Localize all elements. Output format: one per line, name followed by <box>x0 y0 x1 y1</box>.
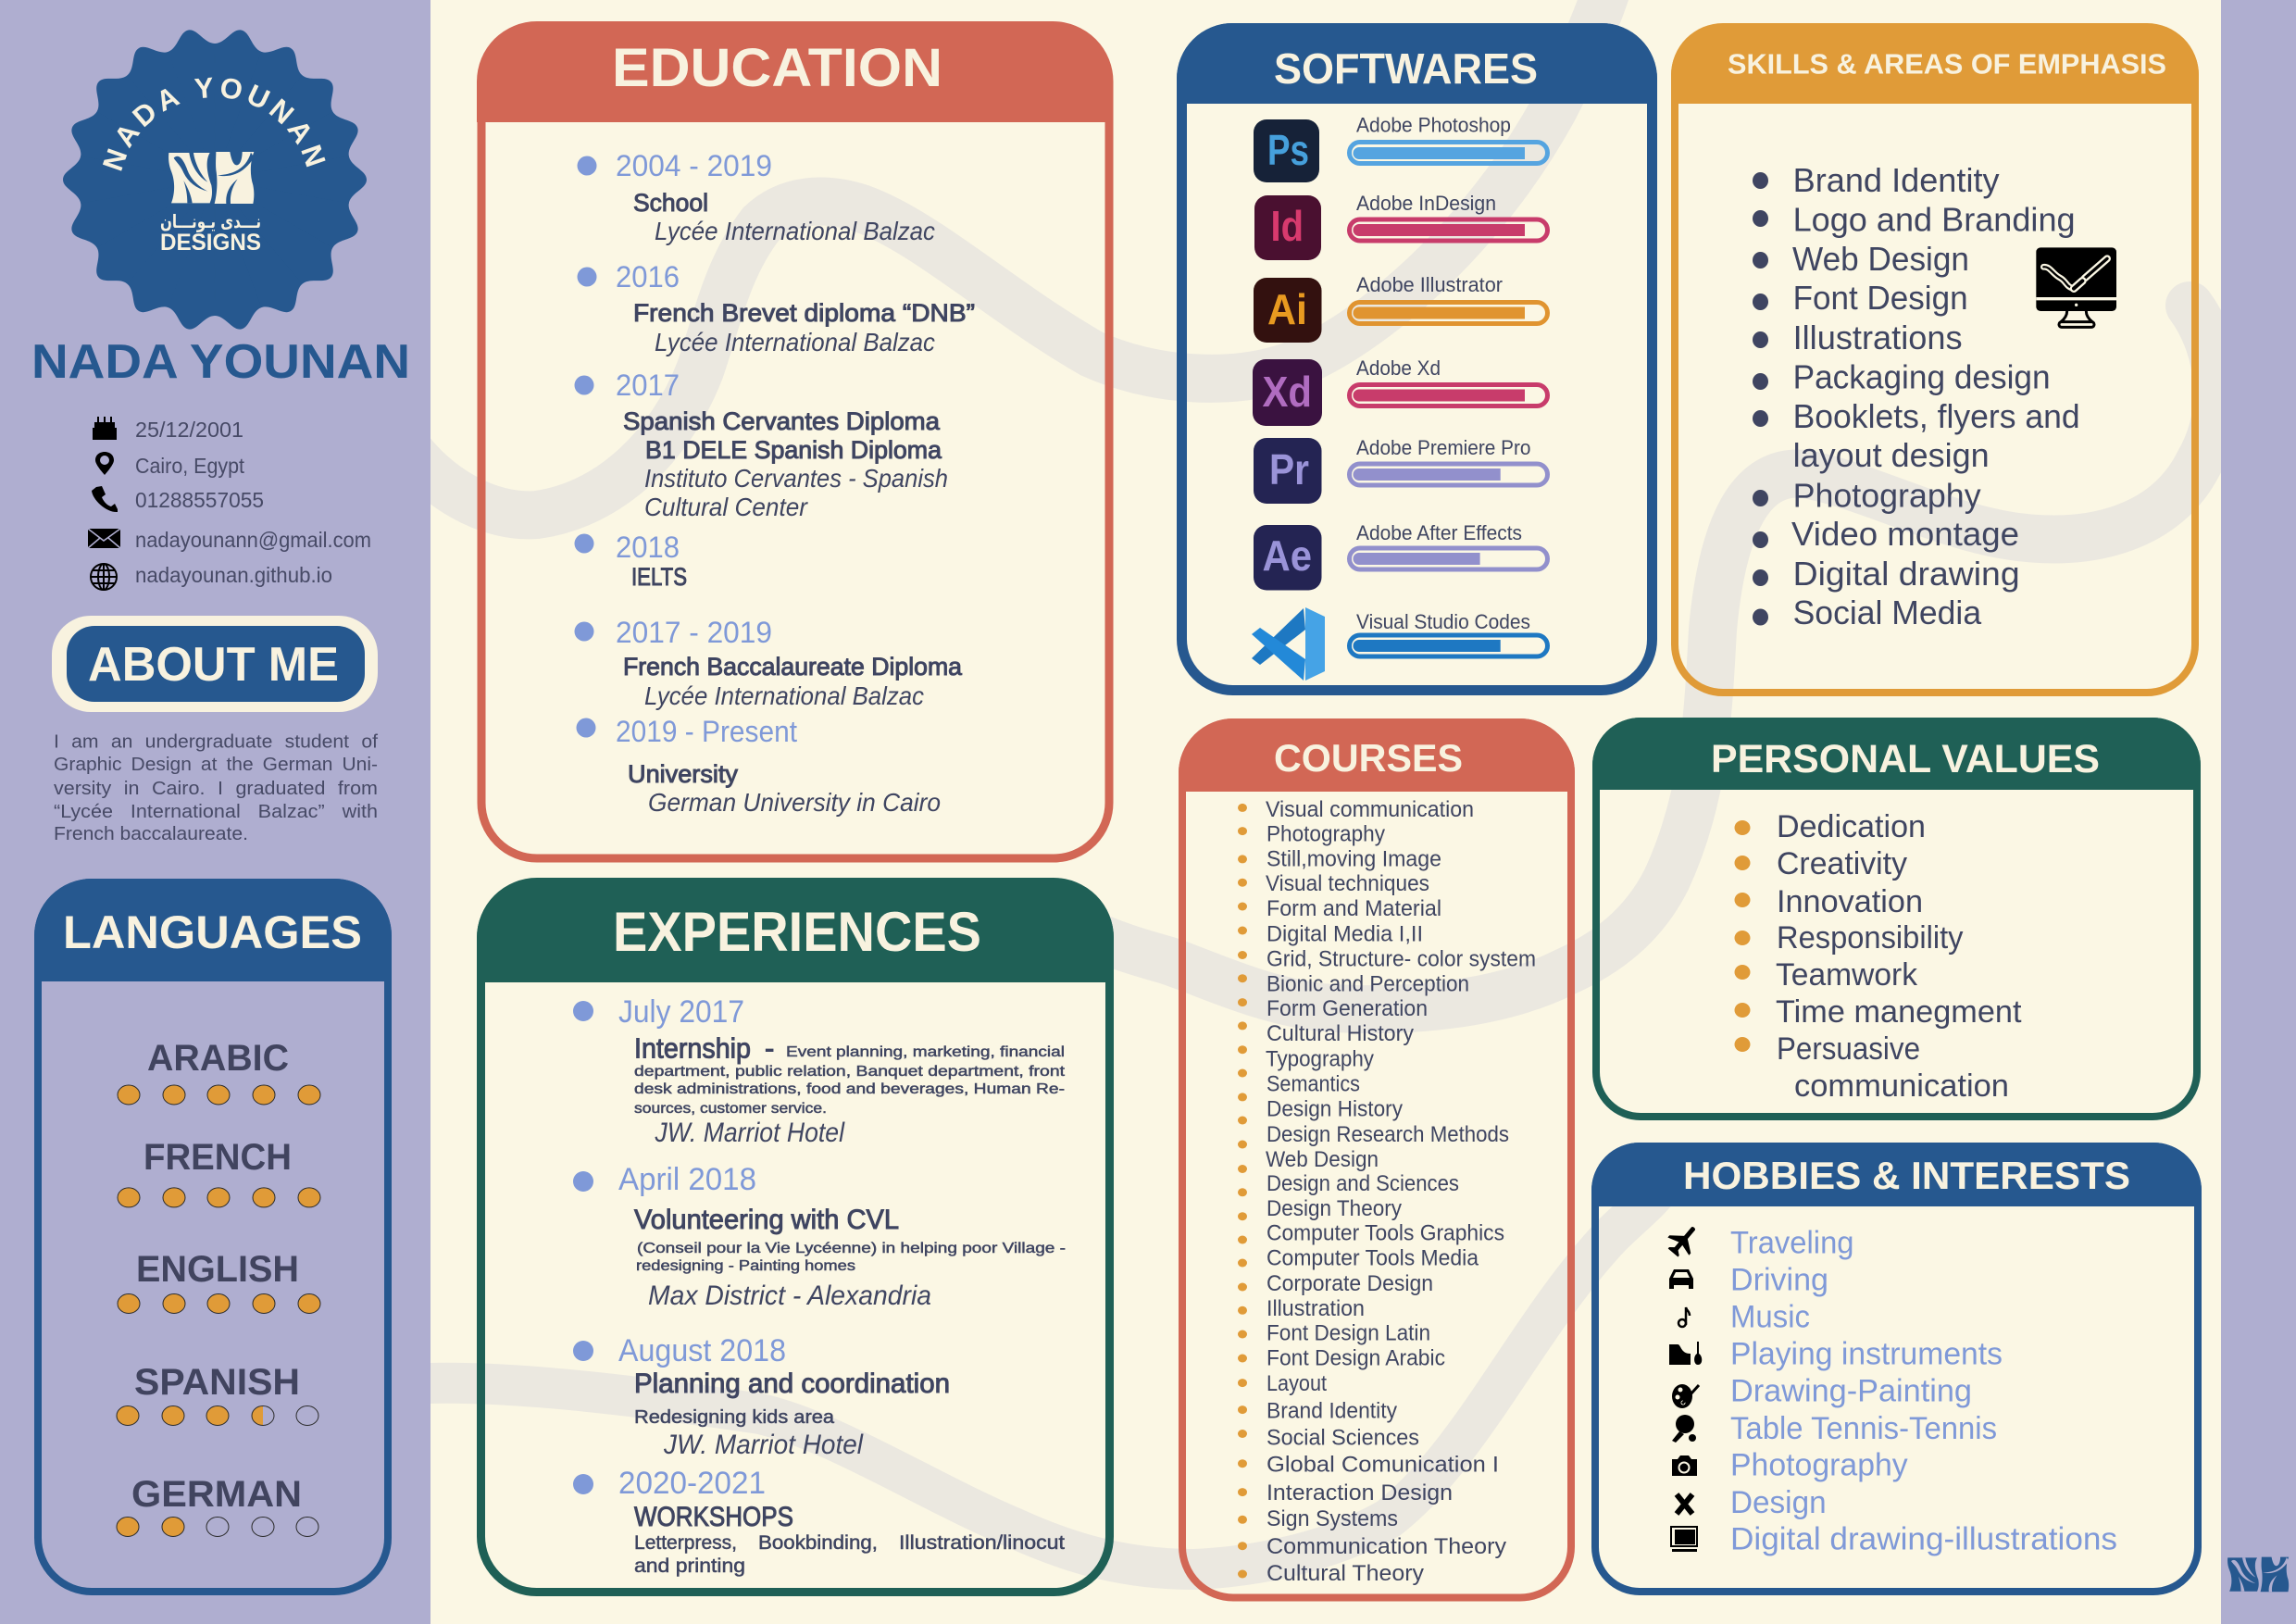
about me text: “Lycée International Balzac” with <box>54 802 378 822</box>
entry: cervantes: Spanish Cervantes Diploma <box>623 407 941 435</box>
entry: planning: August 2018 <box>618 1333 786 1368</box>
icon: indesign <box>1254 195 1321 260</box>
contact details: Cairo, Egypt <box>135 454 245 478</box>
panel: softwares <box>1177 23 1657 691</box>
course list: Typography <box>1266 1046 1374 1071</box>
icon: illustrator: Ai <box>1267 285 1307 333</box>
skill bar: xd: Adobe Xd <box>1356 356 1441 380</box>
heading: softwares: SOFTWARES <box>1274 44 1538 93</box>
skill bar: after effects: Adobe After Effects <box>1356 521 1522 544</box>
skill bar: indesign <box>1350 192 1548 241</box>
course list: Font Design Latin <box>1267 1320 1430 1346</box>
language: spanish: SPANISH <box>134 1362 300 1403</box>
course list: Form and Material <box>1267 896 1441 921</box>
entry: volunteering: (Conseil pour la Vie Lycéenne) in helping poor Village - <box>637 1241 1066 1256</box>
icon: monitor with brush <box>2036 247 2116 327</box>
language: spanish <box>117 1362 318 1426</box>
skill bar: illustrator <box>1350 273 1548 324</box>
skill bar: visual studio: Visual Studio Codes <box>1356 610 1530 633</box>
panel: skills <box>1671 23 2199 693</box>
skill bar: xd <box>1350 356 1548 406</box>
icon: after effects: Ae <box>1263 531 1312 580</box>
icon: xd <box>1253 359 1322 426</box>
language: arabic: ARABIC <box>147 1038 289 1079</box>
entry: volunteering: Volunteering with CVL <box>634 1205 899 1235</box>
entry: baccalaureate <box>574 616 963 710</box>
icon: illustrator <box>1254 278 1322 343</box>
heading: skills: SKILLS & AREAS OF EMPHASIS <box>1728 48 2166 80</box>
hobby: photography: Photography <box>1730 1448 1908 1483</box>
entry: cervantes: Cultural Center <box>644 493 809 521</box>
course list: Digital Media I,II <box>1267 921 1423 946</box>
icon: premiere <box>1254 438 1322 504</box>
course list: Interaction Design <box>1267 1480 1453 1505</box>
entry: brevet <box>578 260 975 356</box>
language: english <box>118 1249 320 1313</box>
skills list: layout design <box>1793 436 1990 474</box>
entry: planning: JW. Marriot Hotel <box>663 1430 864 1460</box>
course list: Global Comunication I <box>1267 1452 1499 1478</box>
contact details: nadayounann@gmail.com <box>135 528 371 552</box>
entry: workshops: WORKSHOPS <box>634 1502 793 1532</box>
entry: cervantes: Instituto Cervantes - Spanish <box>644 464 948 493</box>
about me text <box>54 731 378 844</box>
logo badge: NADA YOUNAN <box>103 78 326 171</box>
heading: experiences: EXPERIENCES <box>613 901 981 963</box>
heading: hobbies: HOBBIES & INTERESTS <box>1683 1154 2130 1197</box>
hobby: music: Music <box>1730 1300 1810 1335</box>
skills list: Font Design <box>1793 279 1968 317</box>
icon: indesign: Id <box>1270 202 1304 250</box>
icon: phone <box>92 486 118 512</box>
entry: cervantes: 2017 <box>616 369 680 402</box>
course list: Form Generation <box>1267 996 1428 1021</box>
hobby: design <box>1677 1485 1827 1520</box>
entry: internship: JW. Marriot Hotel <box>655 1118 845 1148</box>
skills list: Digital drawing <box>1793 555 2020 593</box>
entry: planning <box>573 1333 950 1460</box>
values list: Responsibility <box>1777 920 1963 956</box>
entry: workshops: Illustration/linocut <box>899 1532 1065 1554</box>
skills list: Photography <box>1793 477 1981 515</box>
entry: internship: Internship <box>634 1031 751 1065</box>
language: french: FRENCH <box>144 1137 292 1178</box>
skill bar: premiere <box>1350 436 1548 485</box>
sidebar: right <box>2221 0 2296 1624</box>
panel: experiences <box>477 878 1114 1593</box>
entry: planning: Planning and coordination <box>634 1368 950 1399</box>
values list: Dedication <box>1777 809 1926 844</box>
course list: Font Design Arabic <box>1267 1346 1445 1371</box>
contact details: 01288557055 <box>135 488 264 512</box>
entry: school: School <box>633 189 708 217</box>
about me badge: ABOUT ME <box>88 638 339 692</box>
contact details: 25/12/2001 <box>135 418 243 442</box>
course list: Design Theory <box>1267 1196 1402 1221</box>
entry: brevet: French Brevet diploma “DNB” <box>633 299 975 327</box>
heading: languages: LANGUAGES <box>63 906 362 958</box>
entry: university <box>576 715 941 817</box>
hobby: design: Design <box>1730 1485 1827 1520</box>
entry: volunteering: April 2018 <box>618 1162 756 1197</box>
entry: ielts: IELTS <box>631 563 687 591</box>
entry: cervantes <box>574 369 948 521</box>
panel: hobbies <box>1591 1143 2202 1592</box>
entry: school: Lycée International Balzac <box>655 217 935 245</box>
sidebar: left <box>0 0 430 1624</box>
contact details <box>88 417 371 590</box>
icon: visual studio code <box>1252 607 1325 681</box>
icon: small logo mark <box>2227 1557 2289 1592</box>
course list: Web Design <box>1266 1147 1379 1172</box>
skill bar: photoshop <box>1350 113 1548 163</box>
course list: Photography <box>1267 821 1385 846</box>
about me text: French baccalaureate. <box>54 824 248 844</box>
language: arabic <box>118 1038 320 1105</box>
entry: baccalaureate: 2017 - 2019 <box>616 616 772 649</box>
entry: volunteering: Max District - Alexandria <box>648 1280 931 1311</box>
course list: Grid, Structure- color system <box>1267 946 1536 972</box>
course list: Illustration <box>1267 1296 1365 1321</box>
course list: Computer Tools Graphics <box>1267 1220 1504 1246</box>
icon: xd: Xd <box>1263 368 1312 416</box>
entry: school <box>578 149 935 245</box>
heading: personal values: PERSONAL VALUES <box>1711 737 2100 781</box>
entry: workshops: Bookbinding, <box>758 1532 878 1554</box>
entry: workshops: and printing <box>634 1555 745 1577</box>
hobby: driving <box>1669 1263 1828 1298</box>
icon: premiere: Pr <box>1269 445 1309 493</box>
values list: Teamwork <box>1776 957 1918 993</box>
contact details: nadayounan.github.io <box>135 563 332 587</box>
entry: internship: July 2017 <box>618 994 744 1030</box>
hobby: digital drawing: Digital drawing-illustrations <box>1730 1522 2117 1557</box>
entry: volunteering <box>573 1162 1066 1311</box>
panel: education <box>477 21 1113 858</box>
course list: Brand Identity <box>1267 1398 1397 1424</box>
about me text: Graphic Design at the German Uni- <box>54 755 378 775</box>
language: german: GERMAN <box>131 1474 302 1515</box>
skill bar: photoshop: Adobe Photoshop <box>1356 113 1511 137</box>
course list: Cultural Theory <box>1267 1561 1424 1586</box>
course list: Visual techniques <box>1266 871 1429 896</box>
entry: internship: department, public relation, Banquet department, front <box>634 1064 1066 1080</box>
entry: baccalaureate: Lycée International Balzac <box>644 681 924 710</box>
entry: university: 2019 - Present <box>616 715 797 748</box>
panel: courses <box>1179 718 1575 1598</box>
course list: Sign Systems <box>1267 1506 1398 1531</box>
entry: planning: Redesigning kids area <box>634 1407 835 1428</box>
panel: languages <box>34 879 392 1592</box>
course list: Design History <box>1267 1097 1403 1122</box>
course list: Corporate Design <box>1267 1271 1433 1296</box>
entry: internship <box>573 994 1066 1148</box>
logo badge: نـــدى يـونـــان <box>160 210 261 232</box>
hobby: table tennis: Table Tennis-Tennis <box>1730 1411 1997 1446</box>
course list: Design and Sciences <box>1267 1171 1459 1196</box>
skills list: Video montage <box>1791 515 2019 553</box>
name heading: NADA YOUNAN <box>31 335 410 389</box>
language: german <box>117 1474 318 1537</box>
course list: Computer Tools Media <box>1267 1246 1479 1271</box>
course list: Still,moving Image <box>1267 846 1441 872</box>
logo badge <box>63 30 367 330</box>
entry: ielts: 2018 <box>616 531 680 564</box>
hobby: traveling: Traveling <box>1730 1226 1853 1261</box>
language: french <box>118 1137 320 1207</box>
skill bar: illustrator: Adobe Illustrator <box>1356 273 1503 296</box>
course list: Layout <box>1267 1371 1327 1396</box>
skills list: Web Design <box>1792 240 1969 278</box>
course list: Cultural History <box>1267 1021 1414 1046</box>
icon: location pin <box>95 452 114 475</box>
skill bar: indesign: Adobe InDesign <box>1356 192 1496 215</box>
about me text: versity in Cairo. I graduated from <box>54 779 378 799</box>
values list: Innovation <box>1777 884 1923 919</box>
course list: Social Sciences <box>1267 1426 1419 1450</box>
hobby: painting: Drawing-Painting <box>1730 1374 1972 1409</box>
entry: internship: desk administrations, food and beverages, Human Re- <box>634 1081 1065 1097</box>
entry: workshops <box>573 1466 1065 1577</box>
values list: Persuasive <box>1777 1031 1920 1067</box>
icon: birthday cake <box>93 417 117 440</box>
skill bar: visual studio <box>1350 610 1548 656</box>
skills list: Illustrations <box>1793 319 1963 356</box>
entry: brevet: 2016 <box>616 260 680 294</box>
entry: volunteering: redesigning - Painting homes <box>636 1258 855 1274</box>
entry: ielts <box>574 531 687 591</box>
panel: personal values <box>1592 718 2201 1117</box>
entry: university: German University in Cairo <box>648 788 941 817</box>
icon: photoshop: Ps <box>1267 126 1309 174</box>
hobby: instruments: Playing instruments <box>1730 1337 2003 1372</box>
heading: education: EDUCATION <box>612 38 942 98</box>
heading: courses: COURSES <box>1274 736 1463 780</box>
skill bar: premiere: Adobe Premiere Pro <box>1356 436 1531 459</box>
entry: workshops: Letterpress, <box>634 1532 737 1554</box>
course list: Communication Theory <box>1267 1534 1506 1559</box>
hobby: driving: Driving <box>1730 1263 1828 1298</box>
icon: mail <box>88 529 120 548</box>
language: english: ENGLISH <box>136 1249 299 1290</box>
course list <box>1266 797 1536 1586</box>
course list: Semantics <box>1267 1072 1360 1097</box>
values list: Creativity <box>1777 846 1907 881</box>
entry: internship: sources, customer service. <box>634 1101 827 1117</box>
values list: Time manegment <box>1776 994 2022 1030</box>
skills list: Brand Identity <box>1793 161 2000 199</box>
course bullets <box>1238 804 1247 1578</box>
skills list: Packaging design <box>1793 357 2051 396</box>
entry: school: 2004 - 2019 <box>616 149 772 182</box>
hobby: traveling <box>1663 1218 1853 1262</box>
entry: internship: - <box>765 1031 774 1065</box>
skills list: Booklets, flyers and <box>1793 397 2080 435</box>
entry: baccalaureate: French Baccalaureate Diploma <box>623 653 963 681</box>
skills list: Social Media <box>1793 593 1982 631</box>
skill bar: after effects <box>1350 521 1548 569</box>
logo badge: DESIGNS <box>160 230 261 256</box>
values list: communication <box>1794 1068 2009 1104</box>
course list: Design Research Methods <box>1267 1122 1509 1147</box>
entry: university: University <box>628 760 738 788</box>
icon: photoshop <box>1254 119 1319 182</box>
entry: internship: Event planning, marketing, financial <box>786 1044 1065 1060</box>
course list: Bionic and Perception <box>1267 972 1469 997</box>
hobby: music <box>1678 1300 1810 1335</box>
entry: cervantes: B1 DELE Spanish Diploma <box>645 436 942 464</box>
skills list <box>1753 161 2080 631</box>
entry: brevet: Lycée International Balzac <box>655 328 935 356</box>
course list: Visual communication <box>1266 797 1474 822</box>
values list <box>1735 809 2022 1104</box>
about me text: I am an undergraduate student of <box>54 731 378 752</box>
entry: workshops: 2020-2021 <box>618 1466 766 1501</box>
about me badge <box>52 616 378 712</box>
icon: after effects <box>1254 525 1322 591</box>
icon: globe <box>91 564 117 590</box>
skills list: Logo and Branding <box>1793 200 2076 239</box>
